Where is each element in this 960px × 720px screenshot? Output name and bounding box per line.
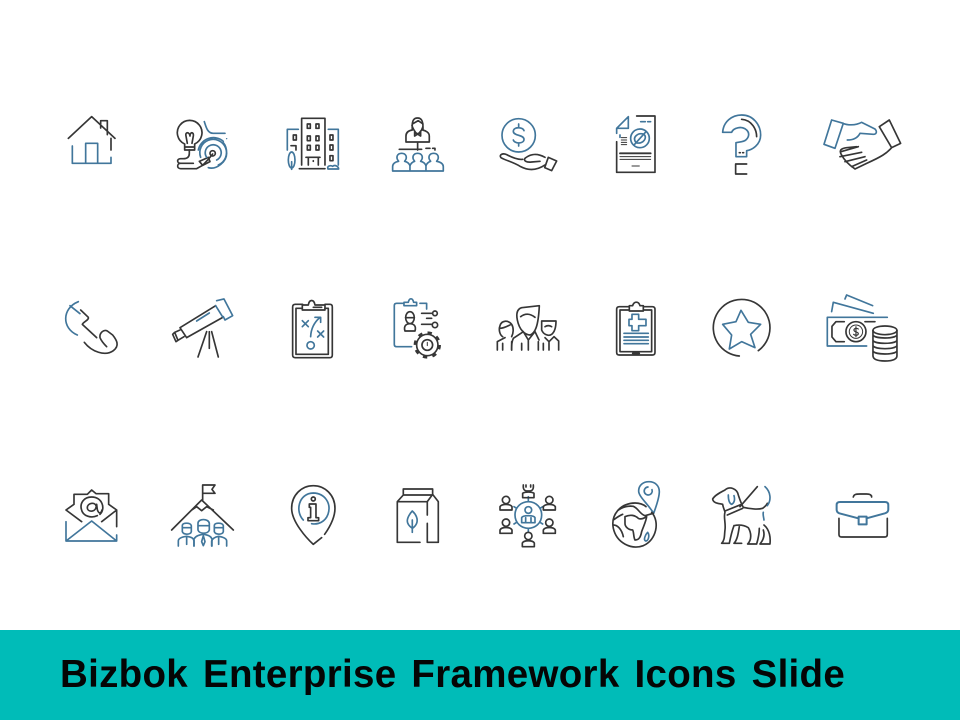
icon: briefcase — [837, 494, 888, 537]
footer band — [0, 630, 960, 720]
icon: globe with location pin — [613, 482, 659, 547]
icon: network of people — [500, 485, 555, 547]
icon: information map pin — [292, 486, 335, 544]
icon: dollar coin in hand — [500, 119, 557, 171]
icon: question mark — [723, 115, 761, 174]
icon: banknotes and coins — [827, 295, 897, 361]
icon: process settings — [394, 299, 440, 357]
icon: email envelope — [66, 490, 117, 541]
icon: clipboard with strategy — [293, 300, 332, 358]
icon: office buildings — [287, 118, 339, 169]
icon: telephone handset — [66, 302, 117, 353]
icon: group of three people — [497, 306, 559, 350]
icon: house — [68, 117, 115, 163]
icon: presenter and audience — [393, 118, 443, 171]
icon: handshake — [824, 120, 901, 169]
icon: light bulb and target — [177, 120, 227, 169]
icon: star in circle — [713, 299, 770, 356]
icon: medical clipboard — [617, 302, 655, 355]
icon: guide dog — [713, 487, 770, 544]
icon: milk carton with leaf — [397, 489, 438, 542]
icon: document with leaf — [617, 116, 655, 172]
icon: team on mountain with flag — [172, 485, 233, 546]
icon: telescope — [173, 299, 233, 357]
title: Bizbok Enterprise Framework Icons Slide — [60, 653, 845, 696]
